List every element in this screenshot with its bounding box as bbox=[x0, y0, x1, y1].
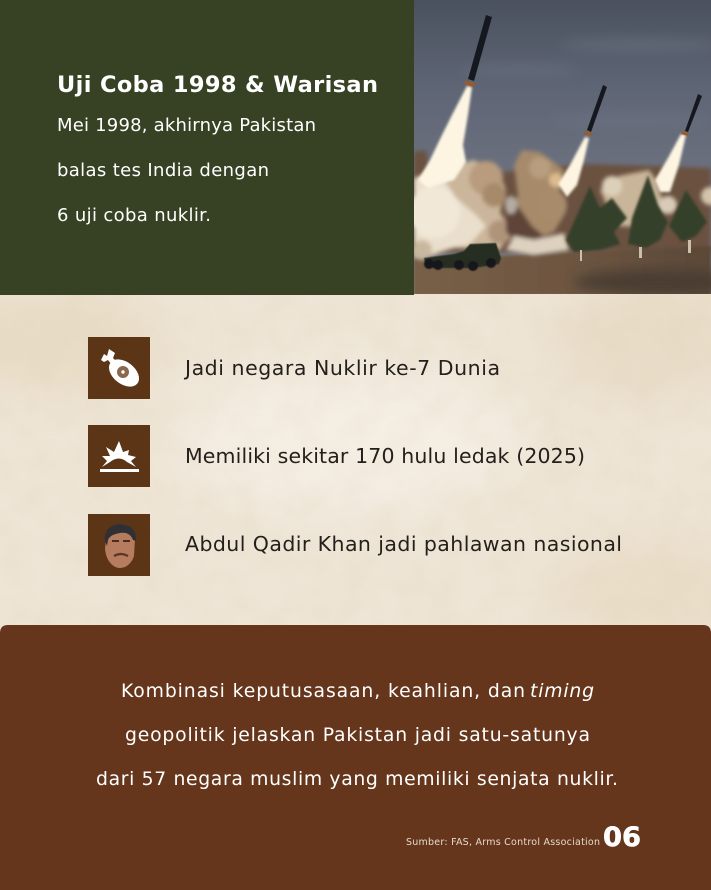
middle cloud bbox=[512, 148, 566, 238]
launcher truck bbox=[424, 243, 501, 271]
right cloud bbox=[600, 170, 664, 228]
text block: conclusion bbox=[96, 681, 618, 790]
left cloud base bbox=[414, 160, 512, 258]
text block: conclusion: timing bbox=[530, 681, 594, 702]
text block: intro: Mei 1998, akhirnya Pakistan bbox=[57, 115, 316, 136]
low white smoke bbox=[506, 233, 569, 255]
text block: intro: 6 uji coba nuklir. bbox=[57, 205, 211, 226]
panel: bottom conclusion bbox=[0, 625, 711, 890]
trees bbox=[566, 175, 707, 252]
text block: conclusion: geopolitik jelaskan Pakistan jadi satu-satunya bbox=[125, 725, 590, 746]
smoke clouds bbox=[408, 150, 711, 260]
panel: top green header bbox=[0, 0, 414, 295]
list row 1 bbox=[88, 337, 500, 399]
heading: Uji Coba 1998 & Warisan bbox=[57, 72, 378, 98]
list row 3 bbox=[88, 514, 622, 576]
left pale cloud bbox=[414, 178, 486, 258]
icon: nuclear bomb bbox=[88, 337, 150, 399]
text block: conclusion: dari 57 negara muslim yang memiliki senjata nuklir. bbox=[96, 769, 618, 790]
text block: conclusion: Kombinasi keputusasaan, keahlian, dan bbox=[121, 681, 525, 702]
page number: 06 bbox=[603, 822, 641, 853]
panel: paper background bbox=[0, 280, 711, 640]
text block: intro bbox=[57, 115, 316, 226]
ground bbox=[414, 246, 711, 295]
rockets bbox=[464, 15, 702, 136]
text: item 2: Memiliki sekitar 170 hulu ledak (2025) bbox=[185, 444, 585, 468]
rocket flames bbox=[418, 86, 686, 197]
list row 2 bbox=[88, 425, 585, 487]
icon: explosion bbox=[88, 425, 150, 487]
icon: portrait of Abdul Qadir Khan bbox=[88, 514, 150, 576]
text block: intro: balas tes India dengan bbox=[57, 160, 269, 181]
tree line bbox=[414, 150, 711, 252]
photo: rockets launching bbox=[408, 0, 711, 295]
source: Sumber: FAS, Arms Control Association bbox=[406, 837, 600, 848]
text: item 1: Jadi negara Nuklir ke-7 Dunia bbox=[183, 356, 500, 380]
text: item 3: Abdul Qadir Khan jadi pahlawan nasional bbox=[185, 532, 622, 556]
